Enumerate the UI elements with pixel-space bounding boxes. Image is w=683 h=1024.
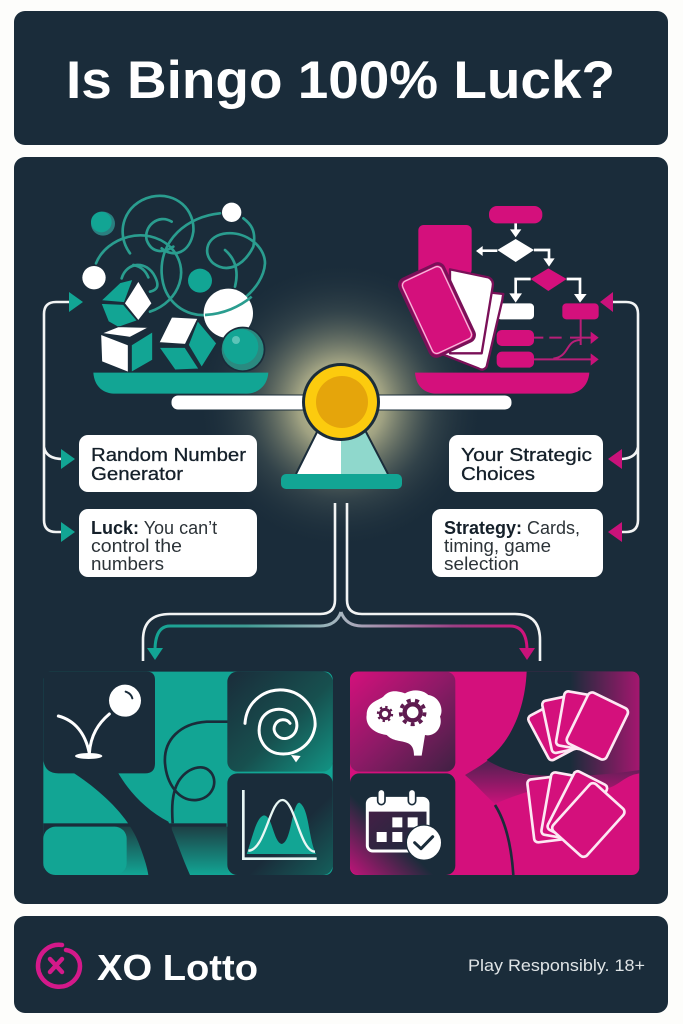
luck panel xyxy=(43,672,333,875)
label: your strategic choices xyxy=(449,435,603,492)
main panel xyxy=(14,157,668,904)
teal sphere xyxy=(220,327,265,372)
distribution chart tile xyxy=(227,773,333,875)
large white ball xyxy=(204,289,253,338)
label: strategy: selection xyxy=(444,554,519,574)
fanned cards xyxy=(397,261,503,370)
label: luck: control the xyxy=(91,536,182,556)
label: random number generator: Generator xyxy=(91,464,183,484)
loop crossing large ball xyxy=(205,297,252,315)
white ball top right xyxy=(222,203,241,222)
die tilted xyxy=(101,279,152,327)
strategy illustration: flowchart and cards xyxy=(397,206,599,394)
label: luck: Luck: You can’t xyxy=(91,518,217,538)
shaded band xyxy=(465,760,639,804)
balance scale beam xyxy=(171,395,512,410)
brand name: XO Lotto xyxy=(97,947,258,988)
lower strip shading xyxy=(43,823,228,875)
right connector wires with arrows xyxy=(600,292,638,542)
label: random number generator xyxy=(79,435,257,492)
dark road curve xyxy=(72,772,190,875)
white ball left xyxy=(82,266,106,289)
scale fulcrum xyxy=(281,430,402,489)
left connector wires with arrows xyxy=(44,292,83,542)
pink base xyxy=(350,672,639,875)
label: luck: numbers xyxy=(91,554,164,574)
loop line xyxy=(165,722,228,823)
dark upper right area xyxy=(487,672,639,776)
logo mark xyxy=(38,945,80,987)
pink tall block xyxy=(418,225,472,275)
label: strategy: timing, game xyxy=(444,536,551,556)
teal tray xyxy=(93,373,268,394)
die lower centre xyxy=(159,317,217,370)
label: luck xyxy=(79,509,257,577)
top card fan xyxy=(527,691,630,762)
dark curve line xyxy=(495,805,513,875)
branching arrows to lower panels xyxy=(143,503,540,661)
bouncing ball tile xyxy=(43,672,155,773)
calendar tile xyxy=(350,773,455,875)
brain tile xyxy=(350,672,455,772)
title panel xyxy=(14,11,668,145)
die lower left xyxy=(101,327,153,372)
luck illustration: loops, dice and balls xyxy=(82,196,268,394)
spiral tile xyxy=(227,672,333,772)
flowchart xyxy=(476,206,599,368)
gold coin xyxy=(302,363,380,441)
bottom card fan xyxy=(527,770,626,859)
central glow xyxy=(196,260,486,550)
tangled random loops xyxy=(96,196,265,315)
strategy panel xyxy=(350,672,639,875)
label: your strategic choices: Your Strategic xyxy=(461,445,592,465)
teal ball top left xyxy=(91,212,115,236)
teal ball centre xyxy=(188,269,212,293)
label: strategy xyxy=(432,509,603,577)
footer panel xyxy=(14,916,668,1013)
label: your strategic choices: Choices xyxy=(461,464,535,484)
responsibility note: Play Responsibly. 18+ xyxy=(468,956,645,975)
pink tray xyxy=(415,373,589,394)
label: random number generator: Random Number xyxy=(91,445,246,465)
title: Is Bingo 100% Luck? xyxy=(66,51,615,110)
teal base xyxy=(43,672,333,875)
label: strategy: Strategy: Cards, xyxy=(444,518,580,538)
